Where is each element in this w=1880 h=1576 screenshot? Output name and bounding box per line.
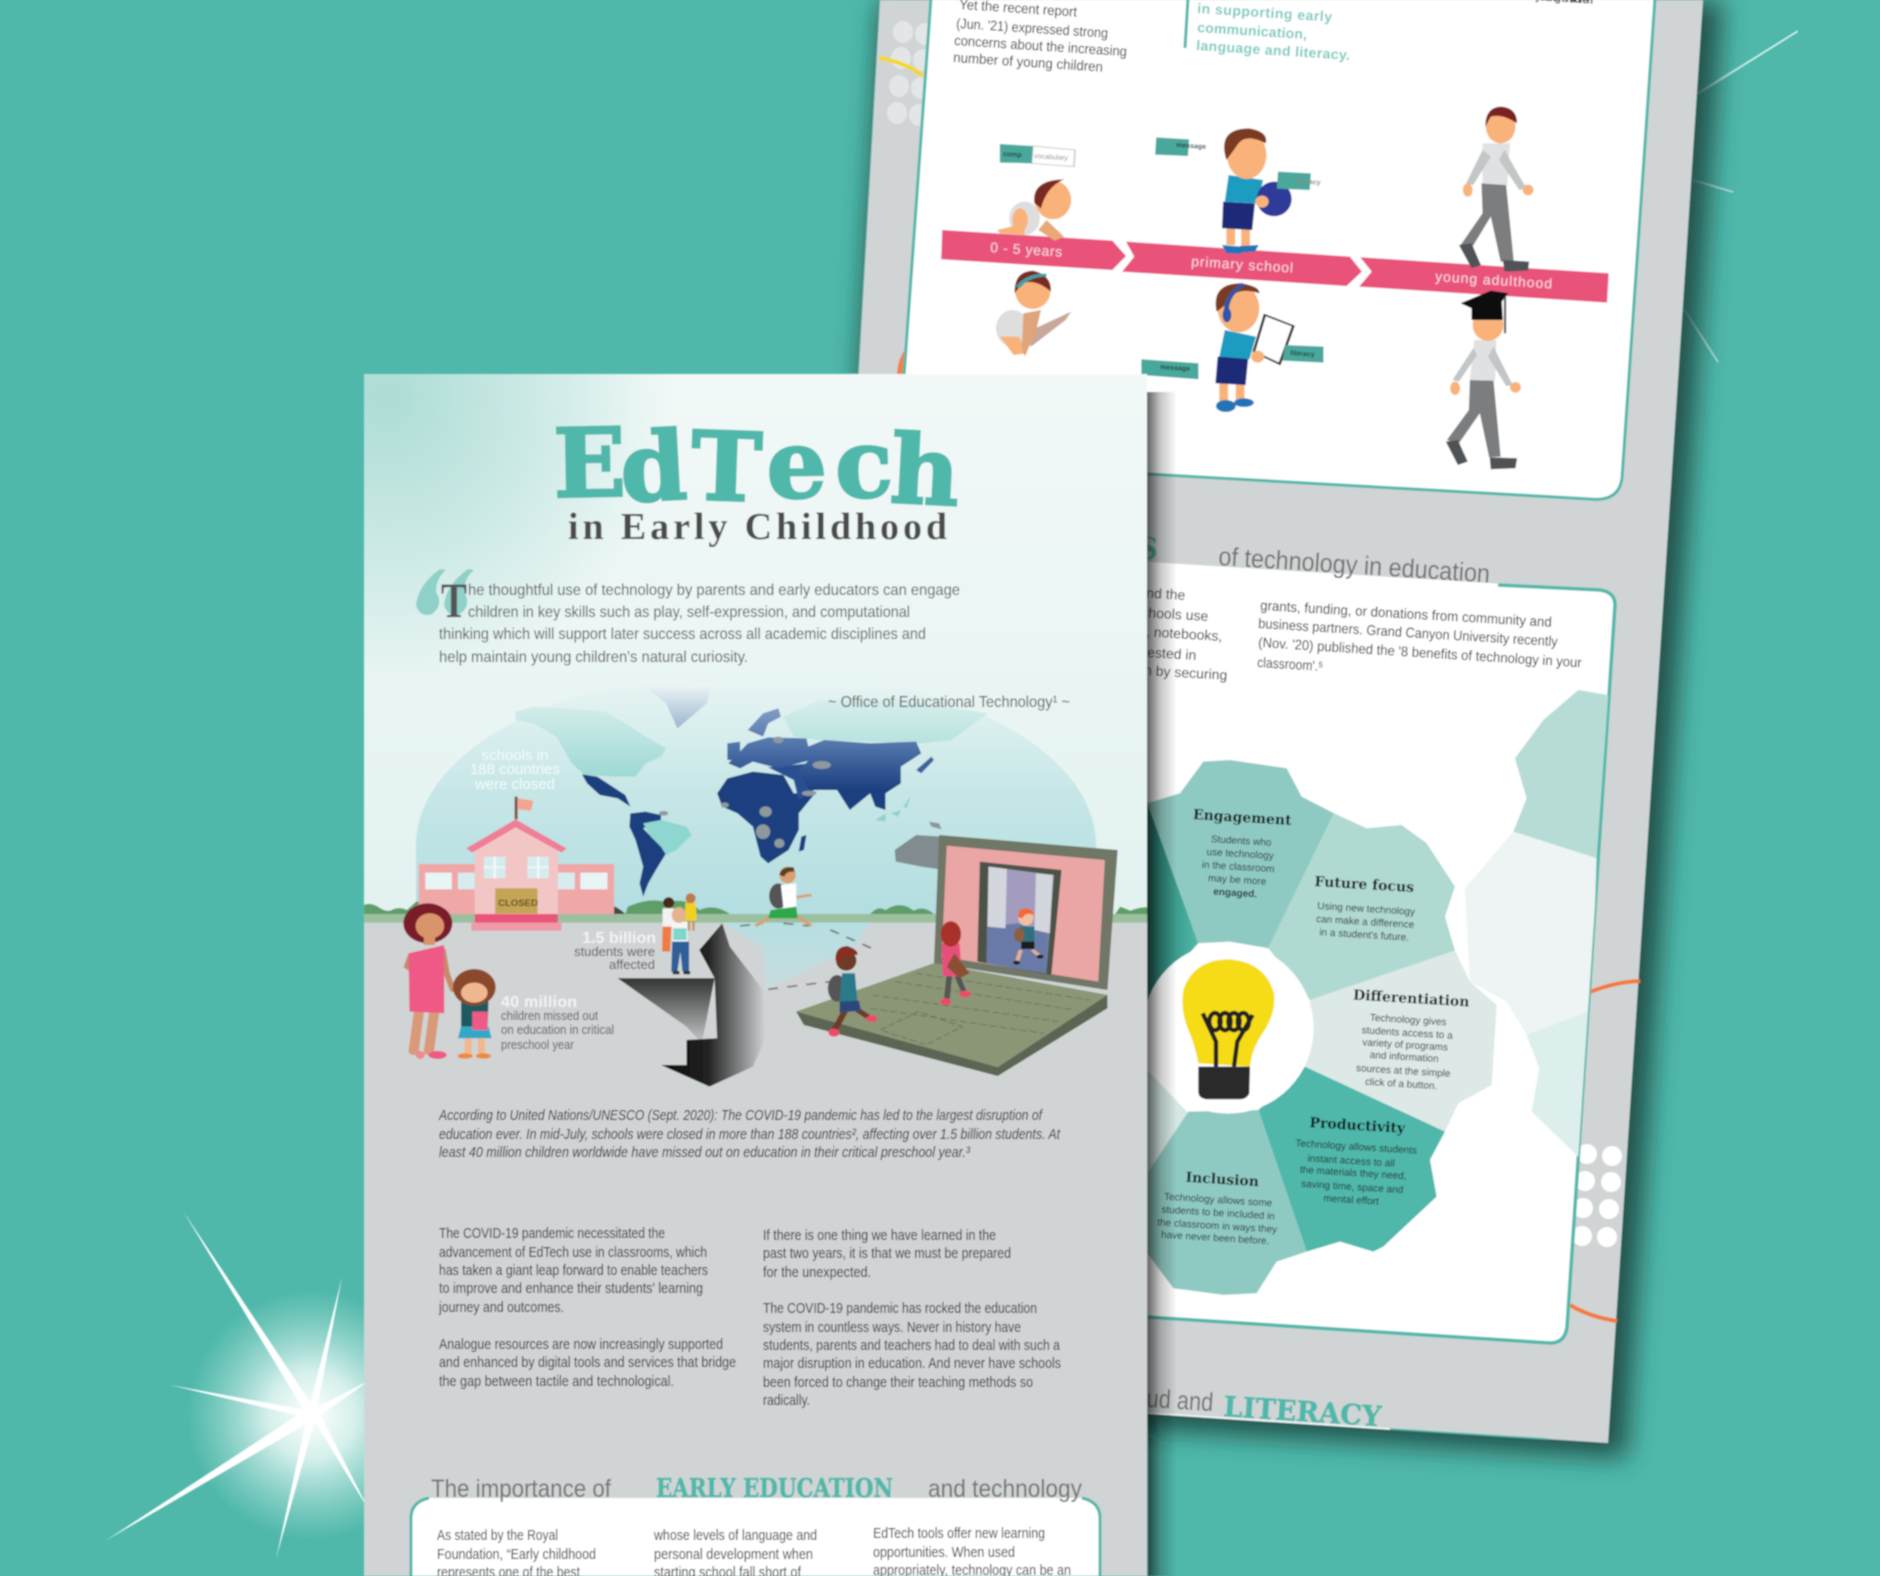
back page shadow <box>800 0 1722 1458</box>
text: report intro <box>953 0 1127 75</box>
petal: inclusion <box>1147 1110 1307 1295</box>
text: benefits intro left: tablets, notebooks, <box>1105 621 1223 644</box>
text: teal pull quote: language and literacy. <box>1196 37 1351 63</box>
orange arc: left <box>897 350 905 374</box>
text: benefits intro right: business partners. Grand Canyon University recently <box>1258 615 1558 649</box>
tree line <box>364 900 1147 915</box>
figure: child in doorway <box>1013 908 1044 965</box>
heading: early education <box>431 1474 1082 1504</box>
text: future focus: Future focus <box>1314 874 1415 896</box>
text: UNESCO statement <box>438 1107 1061 1161</box>
text: benefits intro left: schools use <box>1134 604 1209 624</box>
corner tint <box>363 373 643 648</box>
petal: differentiation <box>1305 951 1497 1132</box>
figure labels text: literacy <box>1296 178 1321 187</box>
dots: right margin <box>1572 1144 1622 1247</box>
heading: benefits of technology: S <box>1135 531 1159 567</box>
text: left column: to improve and enhance their students' learning <box>439 1280 703 1297</box>
text: differentiation: students access to a <box>1361 1025 1453 1042</box>
text: right column: for the unexpected. <box>763 1264 871 1281</box>
figure: woman <box>403 903 453 1059</box>
figure labels text: message <box>1160 364 1190 373</box>
callout: 188 countries: were closed <box>474 776 555 793</box>
text: differentiation: Differentiation <box>1353 987 1470 1011</box>
text: right column: major disruption in education. And never have schools <box>763 1355 1061 1372</box>
text: report intro: (Jun. '21) expressed strong <box>956 15 1109 41</box>
drop cap: T <box>441 572 467 628</box>
panel: life stages <box>898 0 1655 499</box>
quote text: help maintain young children's natural curiosity. <box>439 649 748 666</box>
text: differentiation: Technology gives <box>1370 1013 1447 1028</box>
ground crack <box>618 923 766 1087</box>
sparkle: top right <box>1682 31 1798 362</box>
text: benefits intro right: grants, funding, or donations from community and <box>1260 597 1552 630</box>
text: productivity: the materials they need, <box>1300 1165 1407 1182</box>
crack gap <box>722 923 870 990</box>
petal: future focus <box>1268 813 1455 1000</box>
petal: left wedge <box>1146 803 1199 1000</box>
text: future focus: Using new technology <box>1317 901 1415 918</box>
heading: read aloud and literacy: aloud and <box>1117 1381 1214 1417</box>
text: benefits intro right: (Nov. '20) published the '8 benefits of technology in your <box>1258 634 1582 670</box>
petal: productivity <box>1258 1067 1445 1252</box>
dots: left margin <box>887 21 935 126</box>
title: in Early Childhood <box>568 506 947 548</box>
figure: girl on laptop <box>940 921 971 1005</box>
figure: boy on laptop <box>828 946 877 1037</box>
figures: children and adults <box>996 107 1534 469</box>
text: inclusion: the classroom in ways they <box>1157 1217 1277 1236</box>
text: inclusion: Inclusion <box>1185 1170 1259 1190</box>
label: baby top <box>1000 144 1075 167</box>
age timeline banner: 0 - 5 years <box>990 239 1063 260</box>
figure: crying girl <box>453 969 496 1059</box>
orange arcs: right <box>1570 981 1640 1321</box>
heading: benefits of technology <box>1135 531 1491 589</box>
callout: 1.5 billion: affected <box>609 957 655 972</box>
callout: 188 countries <box>470 747 560 793</box>
text: left column: advancement of EdTech use in classrooms, which <box>439 1244 707 1261</box>
text: productivity: Productivity <box>1309 1115 1406 1137</box>
text: left column: and enhanced by digital tools and services that bridge <box>439 1354 736 1371</box>
text: right column <box>763 1227 1061 1409</box>
yellow arc <box>879 58 923 76</box>
label: literacy top <box>1277 172 1311 190</box>
text: productivity <box>1295 1115 1417 1208</box>
text: benefits intro left <box>1105 584 1228 683</box>
figure labels text: comp <box>1003 151 1022 159</box>
figure: baby with tablet <box>996 271 1071 357</box>
text: future focus: in a student's future. <box>1319 927 1409 944</box>
text: UNESCO statement: According to United Nations/UNESCO (Sept. 2020): The COVID-19 pandemic has led to the largest disruption of <box>438 1107 1043 1124</box>
text: early education columns: EdTech tools offer new learning <box>873 1525 1045 1542</box>
text: inclusion: students to be included in <box>1161 1205 1275 1222</box>
front page shadow <box>1147 392 1177 1576</box>
text: report intro: number of young children <box>953 49 1104 75</box>
figure: young adult <box>1459 107 1534 272</box>
text: teal pull quote <box>1185 0 1351 63</box>
text: right column: radically. <box>763 1392 810 1409</box>
text: differentiation: and information <box>1369 1050 1439 1065</box>
text: teal pull quote: in supporting early <box>1197 0 1333 25</box>
figure: baby crawling <box>997 179 1071 241</box>
text: differentiation: click of a button. <box>1365 1077 1438 1092</box>
heading: early education: EARLY EDUCATION <box>656 1474 893 1504</box>
text: engagement: Students who <box>1211 834 1272 849</box>
text: left column <box>438 1225 736 1390</box>
benefit petals <box>1146 690 1610 1296</box>
laptop <box>796 835 1118 1076</box>
page base <box>364 374 1147 1576</box>
globe backdrop <box>416 670 1096 915</box>
text: benefits intro left: invested in <box>1129 643 1197 663</box>
text: engagement <box>1192 807 1293 900</box>
text: inclusion <box>1157 1170 1277 1247</box>
text: productivity: saving time, space and <box>1301 1179 1404 1196</box>
callout: 40 million: 40 million <box>501 994 577 1011</box>
text: early education columns: Foundation, “Early childhood <box>437 1546 596 1563</box>
quote attribution: ~ Office of Educational Technology¹ ~ <box>828 694 1070 711</box>
text: engagement: may be more <box>1208 873 1267 888</box>
text: engagement: in the classroom <box>1201 860 1275 875</box>
callout: 40 million: preschool year <box>501 1037 575 1052</box>
world map and scene <box>364 683 1147 1576</box>
text: differentiation: sources at the simple <box>1356 1063 1451 1080</box>
quote text <box>439 582 960 666</box>
dashed lines <box>740 923 875 989</box>
panel: benefits <box>1146 562 1618 1346</box>
callout: 40 million: children missed out <box>501 1008 598 1023</box>
text: right column: system in countless ways. Never in history have <box>763 1319 1021 1336</box>
text: left column: the gap between tactile and technological. <box>439 1373 674 1390</box>
callout: 40 million <box>501 994 614 1052</box>
figure: boy with ball <box>1222 128 1292 254</box>
quote <box>416 569 960 666</box>
quote text: thinking which will support later success across all academic disciplines and <box>439 626 926 643</box>
figure labels text <box>1003 142 1321 373</box>
page sheet <box>800 0 1703 1443</box>
age timeline banner: young adulthood <box>1435 268 1553 292</box>
figure labels text: literacy <box>1290 350 1315 359</box>
heading: early education: and technology <box>928 1475 1082 1503</box>
icon: quotation mark <box>416 569 474 615</box>
text: early education columns: As stated by the Royal <box>437 1527 558 1544</box>
text: productivity: mental effort <box>1323 1193 1379 1208</box>
text: early education columns <box>437 1525 1071 1576</box>
quote text: children in key skills such as play, self-expression, and computational <box>468 604 910 621</box>
quote text: he thoughtful use of technology by parents and early educators can engage <box>468 582 960 599</box>
right flower petals <box>1465 690 1608 1163</box>
heading: benefits of technology: of technology in education <box>1218 541 1491 589</box>
figure: jumping student <box>755 867 812 926</box>
figure: graduate <box>1446 291 1521 469</box>
callout: 40 million: on education in critical <box>501 1022 614 1037</box>
heading: read aloud and literacy <box>1117 1381 1548 1439</box>
callout: 1.5 billion: students were <box>574 944 655 959</box>
text: report intro: concerns about the increasing <box>954 32 1127 59</box>
figure labels text: message <box>1176 142 1206 151</box>
front page <box>363 372 1149 1576</box>
petal: left pale <box>1148 1072 1188 1172</box>
figure labels text: vocabulary <box>1034 153 1069 162</box>
text: benefits intro left: them by securing <box>1120 661 1228 683</box>
age timeline banner <box>941 230 1609 303</box>
text: benefits intro left: and the <box>1138 584 1186 603</box>
text: productivity: instant access to all <box>1307 1153 1395 1170</box>
figure: boy with tablet <box>1215 283 1293 412</box>
text: inclusion: have never been before. <box>1161 1230 1270 1247</box>
text: inclusion: Technology allows some <box>1164 1192 1273 1209</box>
text: UNESCO statement: least 40 million children worldwide have missed out on education in their critical preschool year.³ <box>439 1144 971 1161</box>
text: left column: Analogue resources are now increasingly supported <box>439 1336 723 1353</box>
text: door sign: CLOSED <box>498 898 539 908</box>
label: message top <box>1155 137 1189 156</box>
text: engagement: use technology <box>1206 847 1274 862</box>
text: future focus <box>1314 874 1415 944</box>
text: engagement: Engagement <box>1192 807 1293 829</box>
text: differentiation <box>1353 987 1470 1092</box>
callout: 188 countries: 188 countries <box>470 761 560 778</box>
text: right column: The COVID-19 pandemic has rocked the education <box>763 1300 1037 1317</box>
age timeline banner: primary school <box>1191 253 1294 276</box>
text: early education columns: whose levels of language and <box>653 1527 817 1544</box>
text: benefits intro right: classroom'.⁵ <box>1257 654 1324 674</box>
callout: 1.5 billion: 1.5 billion <box>582 930 656 947</box>
petal: engagement <box>1147 760 1334 948</box>
sparkle: bottom left <box>105 1211 437 1559</box>
text: differentiation: variety of programs <box>1362 1037 1448 1054</box>
text: UNESCO statement: education ever. In mid-July, schools were closed in more than 188 countries², affecting over 1.5 billion students. At <box>439 1126 1061 1143</box>
ground <box>364 914 1147 1576</box>
heading: read aloud and literacy: LITERACY <box>1223 1390 1383 1433</box>
icon: light bulb <box>1143 943 1314 1114</box>
panel: early education <box>411 1498 1100 1576</box>
text: right column: past two years, it is that we must be prepared <box>763 1245 1011 1262</box>
text: engagement: engaged. <box>1213 887 1258 900</box>
callout: 1.5 billion <box>574 930 656 972</box>
world map <box>516 683 988 897</box>
text: left column: journey and outcomes. <box>438 1299 564 1316</box>
title: EdTech <box>552 408 963 529</box>
text: teal pull quote: communication, <box>1197 19 1308 42</box>
text: right column: students, parents and teachers had to deal with such a <box>763 1337 1061 1354</box>
heading: early education: The importance of <box>431 1475 611 1503</box>
text: productivity: Technology allows students <box>1295 1138 1417 1157</box>
school building <box>419 797 614 931</box>
callout: 188 countries: schools in <box>482 747 548 764</box>
text: left column: has taken a giant leap forward to enable teachers <box>439 1262 708 1279</box>
figures: three students <box>662 893 697 974</box>
text: left column: The COVID-19 pandemic necessitated the <box>439 1225 665 1242</box>
text: future focus: can make a difference <box>1316 914 1415 931</box>
text: right column: been forced to change their teaching methods so <box>763 1374 1033 1391</box>
label: message bottom <box>1141 359 1198 379</box>
text: early education columns: opportunities. When used <box>873 1544 1015 1561</box>
back page <box>800 0 1703 1443</box>
label: literacy bottom <box>1282 345 1323 363</box>
text: right column: If there is one thing we have learned in the <box>763 1227 996 1244</box>
text: benefits intro right <box>1257 597 1582 674</box>
text: early education columns: personal development when <box>654 1546 813 1563</box>
